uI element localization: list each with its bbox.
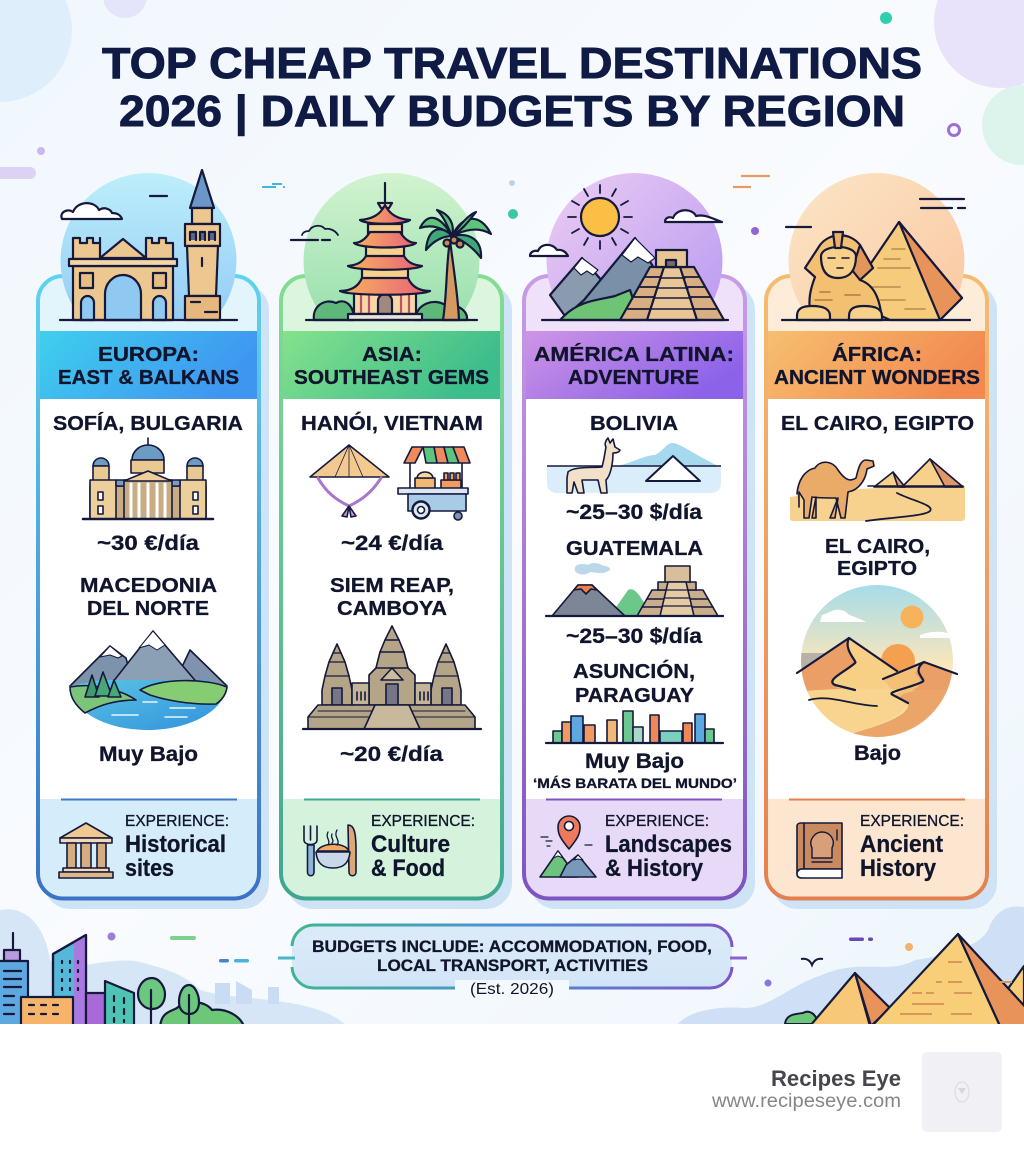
destination: El Cairo desert (797, 535, 960, 765)
experience: Landscapes & History: EXPERIENCE: (605, 813, 709, 830)
destination: Asunción: Muy Bajo (585, 749, 684, 773)
heading: Europa: EUROPA: (98, 344, 199, 366)
destination: Hanói (301, 411, 483, 555)
white footer (0, 1024, 1024, 1154)
experience: Historical sites (59, 813, 229, 882)
icon: sphinx and pyramid (782, 199, 970, 320)
title: TOP CHEAP TRAVEL DESTINATIONS (102, 39, 922, 88)
experience: Landscapes & History: Landscapes (605, 831, 732, 858)
destination: Hanói: ~24 €/día (341, 532, 443, 555)
title (102, 39, 922, 137)
heading: África: ÁFRICA: (832, 343, 922, 366)
destination: El Cairo: EL CAIRO, EGIPTO (781, 412, 974, 435)
divider (546, 798, 722, 800)
experience: Ancient History: History (860, 855, 937, 882)
scene: bottom left city (0, 909, 345, 1031)
destination: Asunción: PARAGUAY (575, 684, 694, 707)
experience: Ancient History (797, 813, 964, 882)
scene: bottom right pyramids (678, 907, 1024, 1026)
divider (61, 798, 237, 800)
experience: Historical sites: Historical (125, 831, 226, 858)
heading: Asia (294, 344, 489, 389)
callout: budgets include (278, 924, 747, 1000)
heading: Europa (58, 344, 239, 389)
experience: Culture & Food: Culture (371, 831, 450, 858)
callout: budgets include: BUDGETS INCLUDE: ACCOMMODATION, FOOD, (312, 937, 712, 956)
divider (304, 798, 480, 800)
panel: Asia (281, 173, 512, 909)
heading: África (774, 343, 980, 389)
destination: Guatemala: ~25–30 $/día (566, 625, 702, 648)
destination: Guatemala: GUATEMALA (566, 537, 703, 560)
experience: Culture & Food: & Food (371, 855, 445, 882)
experience: Culture & Food (304, 813, 475, 882)
destination: Sofía: ~30 €/día (97, 532, 199, 555)
experience: Landscapes & History (540, 813, 732, 882)
destination: Bolivia: ~25–30 $/día (566, 501, 702, 524)
experience: Ancient History: Ancient (860, 831, 943, 858)
destination: Hanói: HANÓI, VIETNAM (301, 411, 483, 435)
experience: Culture & Food: EXPERIENCE: (371, 813, 475, 830)
experience: Historical sites: sites (125, 855, 174, 882)
brand: Recipes Eye (711, 1066, 901, 1112)
destination: Siem Reap: CAMBOYA (337, 597, 447, 620)
destination: Siem Reap: SIEM REAP, (330, 574, 454, 597)
experience: Ancient History: EXPERIENCE: (860, 813, 964, 830)
panel: América Latina (524, 173, 755, 909)
icon: pagoda and palm (291, 183, 491, 320)
destination: El Cairo (781, 412, 974, 521)
heading: Europa: EAST & BALKANS (58, 367, 239, 389)
heading: África: ANCIENT WONDERS (774, 367, 980, 389)
divider (789, 798, 965, 800)
icon: sun, mountains and pyramid (530, 185, 728, 320)
title: 2026 | DAILY BUDGETS BY REGION (119, 87, 905, 137)
destination: El Cairo desert: EL CAIRO, (825, 535, 930, 558)
destination: Sofía: SOFÍA, BULGARIA (53, 412, 243, 435)
destination: El Cairo desert: Bajo (854, 741, 901, 765)
destination: Macedonia (70, 574, 227, 766)
callout: budgets include: (Est. 2026) (470, 981, 554, 998)
destination: El Cairo desert: EGIPTO (837, 557, 917, 580)
callout: budgets include: LOCAL TRANSPORT, ACTIVITIES (377, 956, 648, 975)
destination: Bolivia: BOLIVIA (590, 412, 678, 435)
heading: América Latina (534, 343, 734, 389)
panel: África (766, 173, 997, 909)
destination: Siem Reap: ~20 €/día (340, 743, 443, 766)
logo placeholder (922, 1052, 1002, 1132)
destination: Asunción: ‘MÁS BARATA DEL MUNDO’ (533, 775, 737, 791)
destination: Macedonia: Muy Bajo (99, 742, 198, 766)
brand: Recipes Eye: www.recipeseye.com (711, 1091, 901, 1112)
experience: Historical sites: EXPERIENCE: (125, 813, 229, 830)
heading: Asia: ASIA: (362, 344, 422, 366)
brand: Recipes Eye: Recipes Eye (771, 1066, 901, 1091)
icon: arch and tower (60, 170, 237, 320)
destination: Asunción: ASUNCIÓN, (573, 659, 695, 683)
destination: Siem Reap (303, 574, 481, 766)
heading: Asia: SOUTHEAST GEMS (294, 367, 489, 389)
destination: Macedonia: MACEDONIA (80, 574, 217, 597)
heading: América Latina: AMÉRICA LATINA: (534, 343, 734, 366)
destination: Sofía (53, 412, 243, 555)
panel: Europa (38, 170, 269, 909)
destination: Macedonia: DEL NORTE (87, 597, 209, 620)
experience: Landscapes & History: & History (605, 855, 704, 882)
decorative background shapes (0, 0, 1024, 235)
heading: América Latina: ADVENTURE (568, 367, 699, 389)
destination: Guatemala (546, 537, 723, 648)
destination: Bolivia (547, 412, 721, 524)
destination: Asunción (533, 659, 737, 791)
